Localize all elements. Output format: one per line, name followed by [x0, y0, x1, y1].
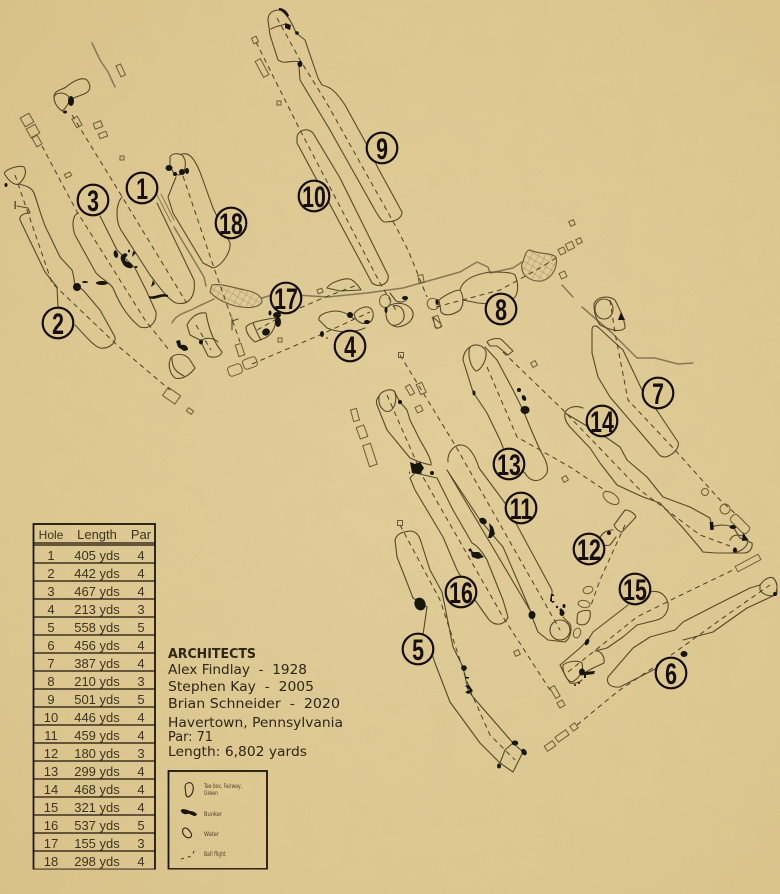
- architects and course info text: Havertown, Pennsylvania: [168, 715, 343, 731]
- scorecard table: 321 yds: [74, 800, 120, 815]
- hole number badges: 1: [136, 171, 148, 206]
- scorecard table: 14: [44, 782, 58, 797]
- scorecard table: 4: [137, 584, 145, 599]
- scorecard table: 4: [137, 638, 145, 653]
- legend: [168, 771, 267, 869]
- scorecard table: 13: [44, 764, 58, 779]
- scorecard table: 210 yds: [74, 674, 120, 689]
- scorecard table: 4: [137, 782, 145, 797]
- architects and course info text: [168, 646, 343, 760]
- scorecard table: Hole: [39, 528, 64, 542]
- hole 11: [398, 352, 571, 642]
- hole 8: [425, 220, 582, 328]
- scorecard table: 468 yds: [74, 782, 120, 797]
- architects and course info text: Par: 71: [168, 729, 213, 745]
- scorecard table: 4: [137, 548, 145, 563]
- legend: Bunker: [204, 810, 222, 818]
- architects and course info text: ARCHITECTS: [168, 646, 256, 662]
- hole number badges: 8: [495, 292, 507, 327]
- scorecard table: 155 yds: [74, 836, 120, 851]
- scorecard table: 213 yds: [74, 602, 120, 617]
- hole 14: [503, 352, 752, 553]
- hole 13: [463, 339, 621, 507]
- hole 12: [572, 510, 636, 639]
- hole 6: [544, 578, 777, 751]
- hole 1: [54, 64, 194, 303]
- scorecard table: 11: [44, 728, 58, 743]
- scorecard table: 558 yds: [74, 620, 120, 635]
- hole number badges: 14: [590, 404, 614, 439]
- scorecard table: [33, 524, 155, 870]
- architects and course info text: Brian Schneider - 2020: [168, 696, 340, 712]
- hole number badges: 7: [652, 376, 664, 411]
- scorecard table: 442 yds: [74, 566, 120, 581]
- hole 16: [376, 390, 565, 708]
- hole 2: [4, 166, 194, 414]
- scorecard table: 17: [44, 836, 58, 851]
- scorecard table: 467 yds: [74, 584, 120, 599]
- hole number badges: 13: [497, 447, 521, 482]
- scorecard table: Length: [77, 527, 117, 542]
- hole 5: [351, 408, 528, 772]
- hole number badges: 6: [665, 656, 677, 691]
- hole number badges: [43, 131, 686, 691]
- hole number badges: 12: [577, 532, 601, 567]
- legend: Water: [204, 830, 219, 838]
- scorecard table: 299 yds: [74, 764, 120, 779]
- scorecard table: 1: [47, 548, 55, 563]
- scorecard table: 3: [137, 836, 145, 851]
- scorecard table: 180 yds: [74, 746, 120, 761]
- hole number badges: 9: [376, 131, 388, 166]
- hole 17 and tee shapes: [187, 279, 361, 357]
- hole number badges: 2: [52, 306, 64, 341]
- scorecard table: 4: [47, 602, 55, 617]
- hole number badges: 11: [510, 491, 532, 526]
- hole number badges: 5: [412, 632, 424, 667]
- hole number badges: 17: [274, 281, 298, 316]
- scorecard table: 387 yds: [74, 656, 120, 671]
- hole number badges: 15: [623, 572, 647, 607]
- scorecard table: 298 yds: [74, 854, 120, 869]
- creeks and water features: [92, 43, 693, 364]
- hole 9: [268, 8, 427, 297]
- hole number badges: 10: [302, 179, 326, 214]
- scorecard table: 5: [137, 818, 145, 833]
- architects and course info text: Alex Findlay - 1928: [168, 662, 307, 678]
- legend: Green: [204, 789, 218, 797]
- scorecard table: 18: [44, 854, 58, 869]
- scorecard table: 3: [47, 584, 55, 599]
- legend: Tee box, Fairway,: [203, 782, 242, 790]
- scorecard table: 459 yds: [74, 728, 120, 743]
- scorecard table: 4: [137, 566, 145, 581]
- hole 3: [20, 113, 195, 378]
- hole number badges: 16: [449, 575, 473, 610]
- scorecard table: 7: [47, 656, 55, 671]
- scorecard table: 446 yds: [74, 710, 120, 725]
- scorecard table: 456 yds: [74, 638, 120, 653]
- scorecard table: 12: [44, 746, 58, 761]
- scorecard table: 3: [137, 674, 145, 689]
- scorecard table: 537 yds: [74, 818, 120, 833]
- scorecard table: 3: [137, 602, 145, 617]
- scorecard table: 501 yds: [74, 692, 120, 707]
- legend: Ball flight: [204, 850, 226, 858]
- hole 4: [227, 307, 373, 377]
- scorecard table: 9: [47, 692, 55, 707]
- scorecard table: 5: [47, 620, 55, 635]
- scorecard table: 4: [137, 800, 145, 815]
- scorecard table: 15: [44, 800, 58, 815]
- scorecard table: 5: [137, 620, 145, 635]
- scorecard table: 8: [47, 674, 55, 689]
- architects and course info text: Length: 6,802 yards: [168, 744, 307, 760]
- hole number badges: 3: [87, 183, 99, 218]
- scorecard table: 5: [137, 692, 145, 707]
- scorecard table: 405 yds: [74, 548, 120, 563]
- scorecard table: 4: [137, 854, 145, 869]
- scorecard table: Par: [131, 527, 152, 542]
- hole 18: [166, 154, 245, 357]
- scorecard table: 4: [137, 710, 145, 725]
- hole 10: [251, 36, 442, 329]
- scorecard table: 10: [44, 710, 58, 725]
- hole number badges: 4: [344, 329, 356, 364]
- hole 7: [592, 297, 738, 516]
- hole 15: [560, 554, 761, 686]
- scorecard table: 2: [47, 566, 55, 581]
- scorecard table: 6: [47, 638, 55, 653]
- scorecard table: 4: [137, 764, 145, 779]
- scorecard table: 4: [137, 728, 145, 743]
- scorecard table: 16: [44, 818, 58, 833]
- scorecard table: 3: [137, 746, 145, 761]
- scorecard table: 4: [137, 656, 145, 671]
- architects and course info text: Stephen Kay - 2005: [168, 679, 314, 695]
- hole number badges: 18: [219, 206, 243, 241]
